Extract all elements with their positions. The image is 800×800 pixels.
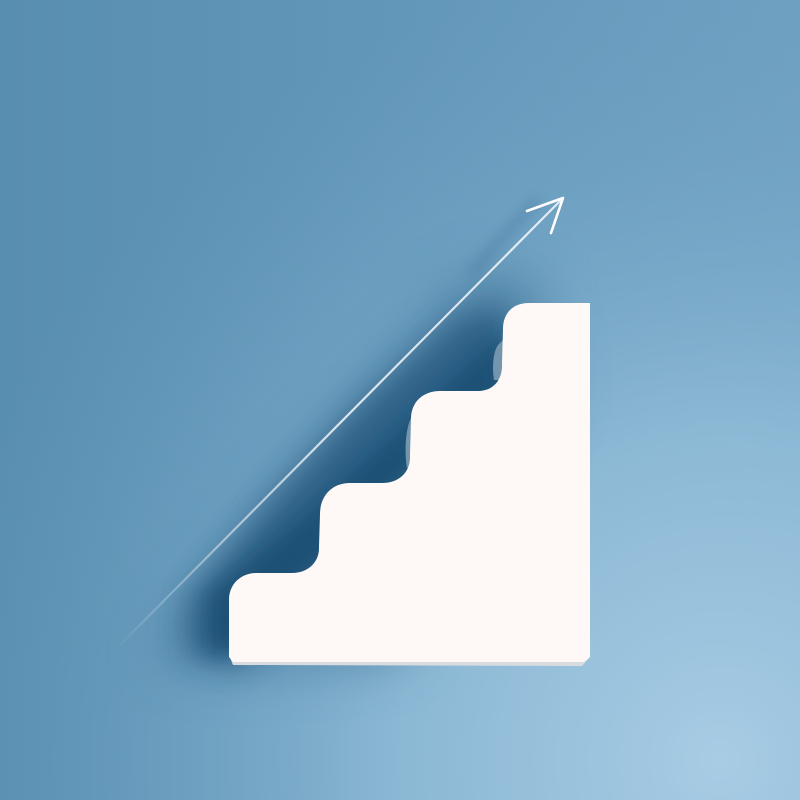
stairs block bbox=[229, 303, 590, 666]
block front face bbox=[229, 303, 590, 662]
shadow of stairs bbox=[150, 200, 560, 672]
arrow bbox=[120, 198, 563, 645]
block side faces bbox=[406, 335, 508, 468]
block bottom edge bbox=[229, 655, 590, 666]
